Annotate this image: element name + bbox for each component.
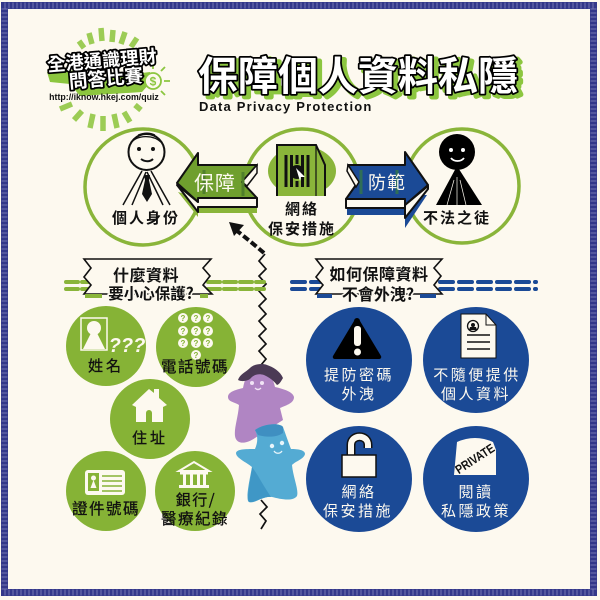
badge url: http://iknow.hkej.com/quiz — [49, 92, 159, 102]
arrow: protect — [177, 153, 257, 217]
banner: what data — [84, 259, 212, 304]
icon: portrait — [81, 318, 107, 350]
badge: quiz sunburst — [46, 28, 170, 131]
label: 閱讀 — [458, 481, 494, 502]
item: bank and medical — [155, 451, 235, 531]
icon: keypad of question marks: ? — [206, 327, 211, 336]
label: 銀行/ — [176, 489, 216, 510]
label: 個人資料 — [441, 383, 511, 404]
icon: gate with cursor — [268, 145, 336, 196]
label: 網絡 — [285, 198, 319, 219]
arrow: prevent — [346, 152, 428, 228]
icon: house — [132, 389, 167, 422]
arrow label: 防範 — [368, 169, 406, 195]
label: 姓名 — [88, 355, 124, 376]
icon: id card — [85, 470, 125, 495]
character: purple — [228, 364, 294, 443]
label: 保安措施 — [323, 500, 393, 521]
label: 不隨便提供 — [433, 364, 521, 385]
icon: keypad of question marks: ? — [194, 327, 199, 336]
icon: keypad of question marks — [178, 313, 213, 360]
dashed arrow — [229, 222, 264, 253]
item: security — [306, 426, 412, 532]
item: privacy policy — [423, 426, 529, 532]
dashes: green — [66, 282, 264, 289]
sunburst rays — [60, 28, 141, 131]
dashes: navy — [292, 282, 536, 289]
zigzag divider bottom — [260, 500, 267, 529]
icon: keypad of question marks: ? — [206, 314, 211, 323]
label: 醫療紀錄 — [161, 507, 229, 529]
label: 住址 — [132, 427, 168, 448]
icon: keypad of question marks: ? — [206, 339, 211, 348]
label: 保安措施 — [268, 218, 336, 239]
zigzag divider top — [259, 254, 266, 365]
banner: how to protect — [316, 259, 442, 305]
banner text: 什麼資料 — [113, 262, 179, 286]
label: 私隱政策 — [441, 500, 511, 521]
label: 提防密碼 — [324, 364, 394, 385]
character: blue — [236, 424, 305, 502]
icon: keypad of question marks: ? — [194, 339, 199, 348]
icon: man with tie — [123, 133, 170, 205]
item: address — [110, 379, 190, 459]
icon: document — [461, 314, 496, 358]
arrow label: 保障 — [194, 167, 236, 196]
green brush behind badge title — [47, 70, 150, 96]
label: 網絡 — [341, 481, 377, 502]
title shadow: 保障個人資料私隱 — [202, 47, 522, 105]
label: 證件號碼 — [72, 497, 140, 519]
circle: personal identity — [85, 129, 201, 245]
icon: open padlock — [342, 437, 376, 477]
item: name — [66, 306, 146, 386]
banner text: 要小心保護? — [108, 282, 194, 304]
badge title — [46, 43, 158, 94]
banner text: 如何保障資料 — [329, 261, 429, 285]
circle: security measures — [244, 129, 360, 245]
badge title: 全港通識理財 — [46, 43, 158, 77]
circle: criminal — [405, 129, 519, 243]
question marks: ??? — [109, 335, 145, 357]
subtitle: Data Privacy Protection — [199, 99, 373, 114]
dollar coin: $ — [150, 74, 157, 88]
label: 電話號碼 — [161, 355, 229, 377]
title text: 保障個人資料私隱 — [198, 44, 518, 102]
label: 個人身份 — [112, 207, 180, 228]
title — [198, 44, 522, 105]
icon: faceless figure — [436, 134, 482, 205]
label: 不法之徒 — [423, 207, 491, 228]
item: phone — [156, 307, 236, 387]
icon: warning triangle — [333, 318, 381, 359]
item: do not provide — [423, 307, 529, 413]
icon: keypad of question marks: ? — [181, 327, 186, 336]
item: password — [306, 307, 412, 413]
banner text: 不會外洩? — [342, 281, 414, 305]
icon: private paper: PRIVATE — [453, 441, 497, 477]
icon: keypad of question marks: ? — [194, 351, 199, 360]
icon: keypad of question marks: ? — [194, 314, 199, 323]
badge title: 問答比賽 — [68, 61, 144, 94]
label: 外洩 — [341, 383, 377, 404]
item: id number — [66, 451, 146, 531]
icon: bank — [179, 462, 209, 488]
icon: keypad of question marks: ? — [181, 314, 186, 323]
icon: keypad of question marks: ? — [181, 339, 186, 348]
